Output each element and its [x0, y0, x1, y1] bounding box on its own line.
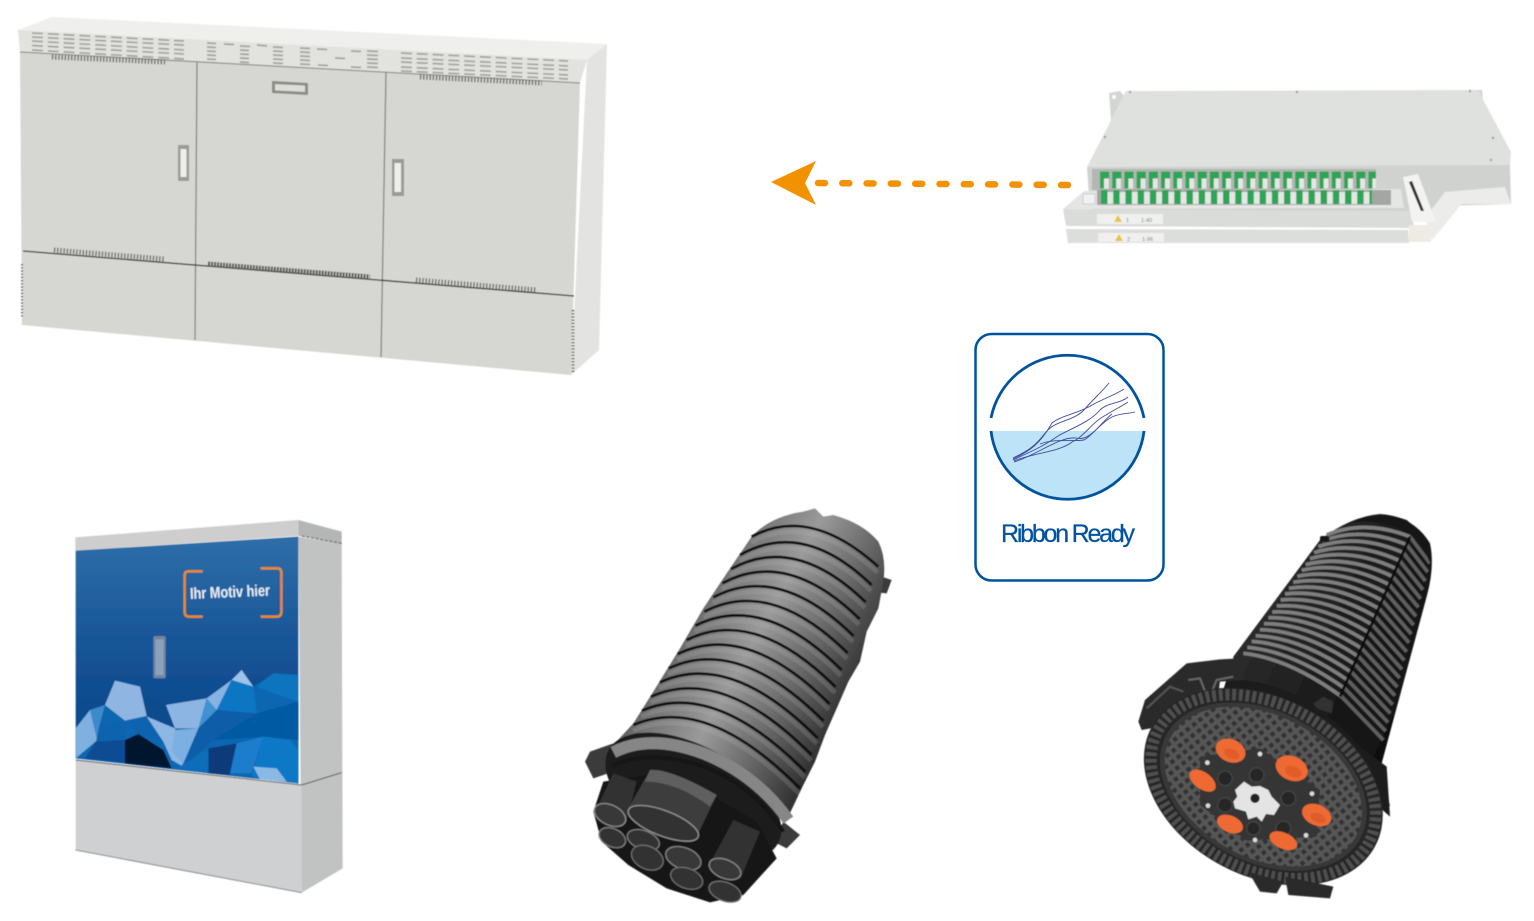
right tall port [706, 820, 760, 884]
hexagonal centre plate [1200, 748, 1320, 841]
left door handle [178, 145, 189, 181]
front face [1087, 165, 1511, 220]
white centre hub [1233, 782, 1280, 822]
ribbed black fibre closure [585, 508, 892, 906]
large port [624, 770, 717, 849]
ribbed closure body [613, 508, 884, 820]
plate studs [1218, 768, 1296, 836]
badge frame [976, 334, 1164, 580]
tray front bar 2: 2 [1127, 237, 1130, 243]
flange rim highlight [613, 743, 788, 820]
bottom port [668, 863, 706, 893]
blue door [76, 537, 298, 783]
circle outline [991, 355, 1144, 499]
lower small port [627, 840, 667, 875]
pull-out tray [1063, 189, 1404, 209]
fibre ribbon strands [1013, 383, 1135, 462]
tray latch [1403, 174, 1436, 242]
ventilation strip [18, 30, 587, 83]
door joints [20, 52, 580, 357]
connector row 1 [1092, 169, 1376, 190]
blue printed street cabinet [75, 520, 343, 893]
cable port cylinders [591, 770, 760, 906]
left lower port [596, 824, 629, 852]
closure cylinder body [1233, 514, 1432, 807]
cabinet lid [18, 17, 607, 60]
end plate disc [1110, 648, 1417, 921]
closure mounting tabs [585, 575, 892, 848]
tray front bar 2 [1066, 229, 1409, 243]
top plate screws [1104, 90, 1494, 161]
tray front bar 1: 1 [1126, 218, 1129, 224]
orange port caps [1186, 734, 1335, 854]
outer slit ring [1119, 658, 1408, 916]
dashed orange arrow [771, 161, 1068, 205]
centre right port [662, 842, 704, 875]
large grey street cabinet [18, 17, 607, 375]
door handle [153, 636, 166, 678]
longitudinal seam [1340, 537, 1410, 697]
ventilation slots [32, 33, 568, 79]
cabinet side [571, 44, 607, 375]
lower front panel [76, 759, 302, 893]
tray front bar 1 [1063, 209, 1414, 228]
rib grooves [633, 526, 878, 788]
cabinet top cover [75, 520, 298, 551]
seam bracket [1313, 697, 1333, 713]
top end cap rim [1350, 516, 1432, 567]
centre handle [272, 81, 308, 95]
plate screws [1205, 752, 1314, 842]
centre small port [624, 826, 662, 854]
clamp hardware [1138, 658, 1245, 730]
mounting ears [1109, 90, 1484, 120]
tray front bar 2: 1-96 [1142, 237, 1153, 243]
perforated grid face [1137, 675, 1389, 899]
tray front bar 1: 1-40 [1141, 218, 1152, 224]
badge label: Ribbon Ready [1001, 520, 1136, 548]
cabinet front [20, 52, 580, 375]
tray index label [1083, 194, 1095, 204]
top bracket knob [1320, 536, 1329, 542]
panel seams [76, 536, 342, 893]
top cover side [298, 520, 342, 543]
low-poly mountain artwork [76, 670, 298, 783]
top-left port [591, 773, 637, 831]
base clamp band [1220, 658, 1390, 817]
rib highlights [633, 532, 878, 794]
orange photo brackets [185, 568, 281, 617]
top plate [1087, 90, 1511, 167]
barcode-like hinge marks [22, 57, 573, 372]
dome closure with orange ports [1110, 514, 1432, 921]
connector row 2 [1101, 197, 1372, 198]
cabinet caption: Ihr Motiv hier [190, 583, 270, 603]
port cluster backing [593, 772, 777, 902]
water fill [991, 431, 1144, 499]
bottom right port [706, 877, 744, 906]
light rib lines left [1243, 527, 1410, 697]
Ribbon Ready badge [976, 334, 1164, 580]
right door handle [392, 159, 404, 196]
inner ring [1131, 669, 1396, 905]
dimmer rib lines right [1342, 537, 1430, 740]
patch panel rack unit [1063, 90, 1511, 243]
flange disc [585, 706, 802, 887]
bottom feet [1248, 872, 1333, 898]
cabinet side panel [298, 537, 343, 893]
